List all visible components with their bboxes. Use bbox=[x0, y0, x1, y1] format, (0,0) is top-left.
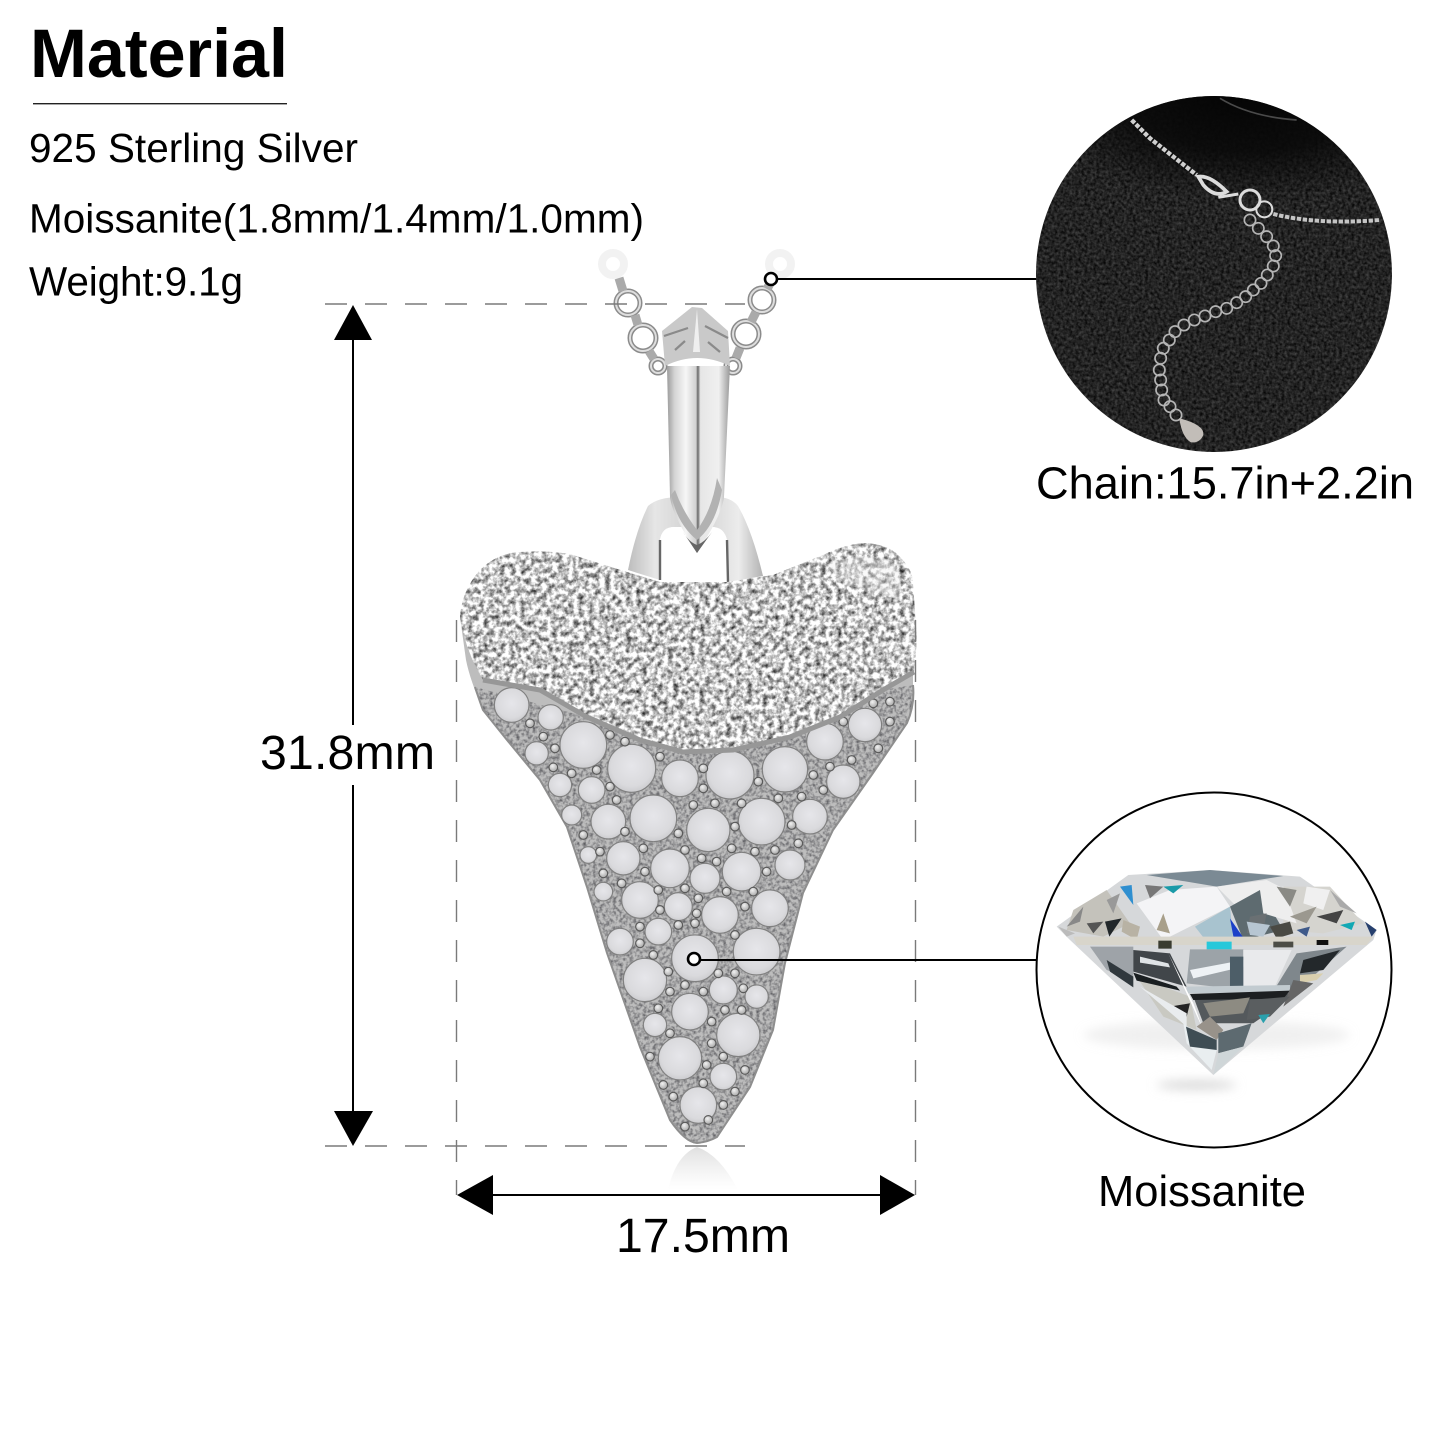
fold highlight bbox=[1220, 98, 1297, 120]
loop arms bbox=[628, 497, 763, 582]
gem body bbox=[1057, 870, 1377, 1075]
moissanite label: Moissanite bbox=[1098, 1168, 1306, 1216]
extender chain bbox=[1154, 214, 1281, 421]
stone callout leader bbox=[688, 953, 1037, 965]
chain length label: Chain:15.7in+2.2in bbox=[1036, 458, 1414, 508]
teardrop charm bbox=[1179, 418, 1203, 442]
reflection bbox=[668, 1147, 738, 1190]
title: Material bbox=[30, 16, 288, 92]
necklace chain bbox=[602, 253, 791, 373]
clasp bbox=[1198, 177, 1272, 217]
cap highlight bbox=[825, 556, 901, 600]
chain photo circle bbox=[1030, 90, 1400, 460]
width arrow bbox=[457, 1175, 915, 1215]
leather grain bbox=[1030, 90, 1400, 460]
pendant illustration bbox=[460, 253, 917, 1190]
textured cap bbox=[460, 543, 917, 752]
height arrow bbox=[334, 305, 373, 1146]
height label: 31.8mm bbox=[260, 726, 435, 780]
cap rim bbox=[483, 672, 914, 752]
moissanite gem bbox=[1057, 870, 1377, 1090]
material spec text bbox=[29, 125, 644, 304]
bail bbox=[662, 307, 730, 553]
moissanite circle border bbox=[1036, 792, 1392, 1148]
material spec text: 925 Sterling Silver bbox=[29, 125, 358, 171]
pave speckle bbox=[475, 685, 913, 1143]
moissanite stones bbox=[494, 688, 894, 1131]
width label: 17.5mm bbox=[616, 1209, 790, 1263]
neck chain bbox=[1132, 120, 1380, 222]
gem shadow bbox=[1083, 1020, 1350, 1090]
chain callout leader bbox=[765, 273, 1037, 285]
material spec text: Moissanite(1.8mm/1.4mm/1.0mm) bbox=[29, 196, 644, 242]
material spec text: Weight:9.1g bbox=[29, 258, 243, 304]
tooth pave base bbox=[460, 600, 913, 1143]
gem facets bbox=[1058, 870, 1377, 1075]
title rule bbox=[33, 103, 287, 104]
dark fold bbox=[1082, 96, 1362, 192]
tooth edge bbox=[475, 685, 913, 1143]
dimension guide lines bbox=[325, 304, 916, 1195]
